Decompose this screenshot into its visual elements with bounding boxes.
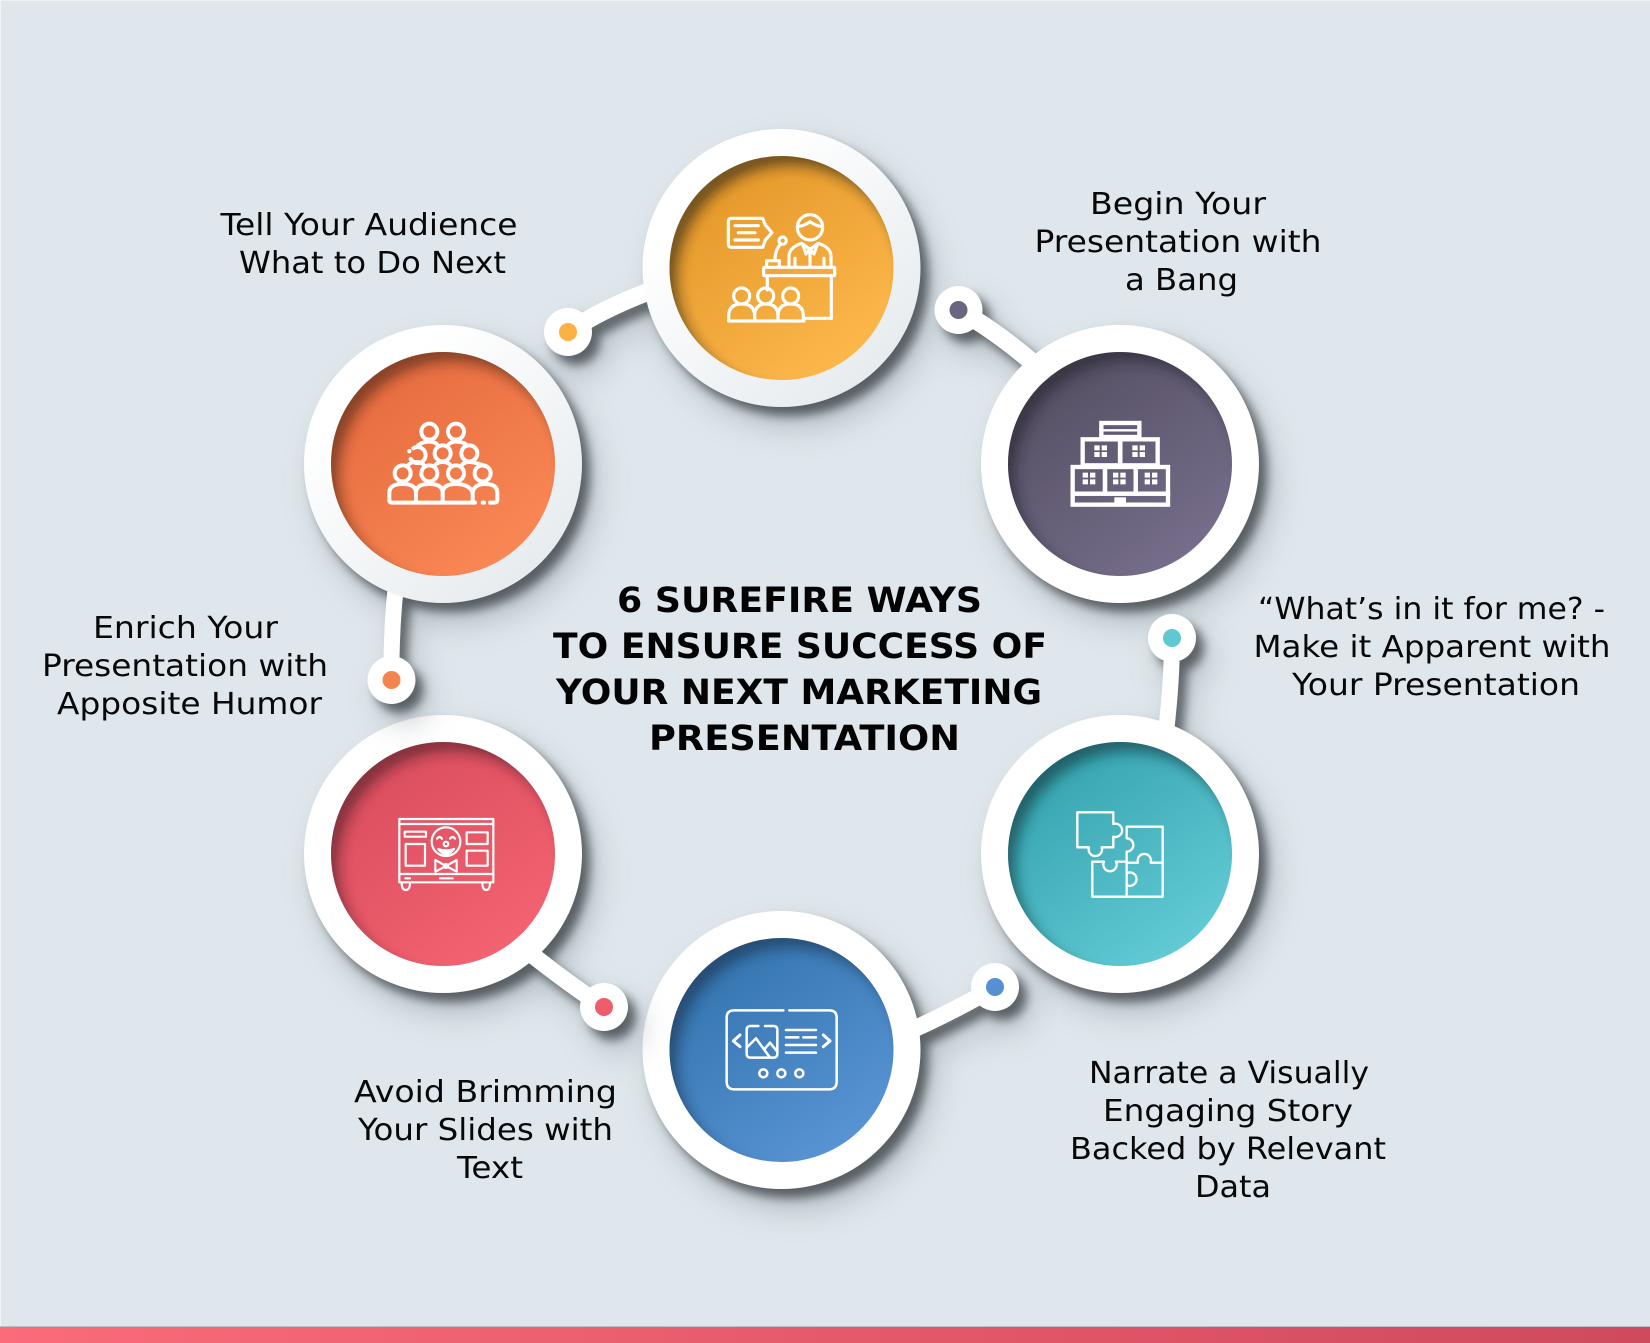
disc: teal bbox=[1008, 742, 1232, 966]
panel: step 1 tell your audience, yellow circle bbox=[544, 129, 920, 407]
disc: yellow bbox=[670, 156, 894, 380]
node dot: red bbox=[595, 998, 613, 1016]
icon: stacked buildings bbox=[1073, 423, 1168, 505]
node dot: yellow bbox=[559, 323, 577, 341]
panel: step 6 enrich with humor, orange circle bbox=[304, 325, 582, 704]
label: avoid brimming slides: Avoid Brimming bbox=[354, 1075, 617, 1110]
label: narrate a visually engaging story bbox=[1070, 1056, 1386, 1205]
panel: step 3 what's in it for me, teal circle bbox=[981, 614, 1259, 993]
icon: screen with clown face bbox=[399, 819, 493, 890]
label: what's in it for me: Make it Apparent with bbox=[1254, 630, 1610, 665]
title: PRESENTATION bbox=[649, 719, 960, 759]
node dot: teal bbox=[1163, 629, 1181, 647]
ring with connector and node: yellow bbox=[544, 129, 920, 407]
disc: red bbox=[331, 742, 555, 966]
label: narrate a visually engaging story: Narrate a Visually bbox=[1089, 1056, 1369, 1091]
label: avoid brimming slides bbox=[354, 1075, 617, 1186]
label: tell your audience bbox=[219, 208, 517, 281]
label: begin your presentation bbox=[1034, 187, 1322, 298]
label: enrich with humor: Enrich Your bbox=[93, 611, 279, 646]
title: 6 SUREFIRE WAYS bbox=[617, 581, 982, 621]
panel: step 2 begin your presentation, purple circle bbox=[934, 286, 1259, 603]
icon: puzzle pieces bbox=[1077, 812, 1163, 897]
label: enrich with humor: Apposite Humor bbox=[57, 687, 323, 722]
panel: step 5 avoid brimming slides, red circle bbox=[304, 715, 628, 1031]
label: begin your presentation: Begin Your bbox=[1090, 187, 1267, 222]
disc: orange bbox=[331, 352, 555, 576]
node dot: orange bbox=[382, 671, 400, 689]
label: narrate a visually engaging story: Backed by Relevant bbox=[1070, 1132, 1386, 1167]
label: what's in it for me: Your Presentation bbox=[1291, 668, 1580, 703]
icon: crowd of people bbox=[389, 424, 497, 503]
label: narrate a visually engaging story: Engaging Story bbox=[1103, 1094, 1353, 1129]
label: tell your audience: Tell Your Audience bbox=[219, 208, 517, 243]
label: narrate a visually engaging story: Data bbox=[1195, 1170, 1271, 1205]
label: avoid brimming slides: Text bbox=[456, 1151, 523, 1186]
label: what's in it for me: “What’s in it for me? - bbox=[1258, 592, 1605, 627]
label: begin your presentation: Presentation with bbox=[1034, 225, 1322, 260]
bottom accent bar bbox=[0, 1326, 1650, 1343]
node dot: blue bbox=[986, 978, 1004, 996]
ring with connector and node: purple bbox=[934, 286, 1259, 603]
label: avoid brimming slides: Your Slides with bbox=[357, 1113, 613, 1148]
title: TO ENSURE SUCCESS OF bbox=[553, 627, 1047, 667]
title: YOUR NEXT MARKETING bbox=[555, 673, 1042, 713]
label: enrich with humor: Presentation with bbox=[42, 649, 328, 684]
title bbox=[553, 581, 1047, 759]
panel: step 4 narrate a visually engaging story, blue circle bbox=[642, 911, 1019, 1189]
ring with connector and node: orange bbox=[304, 325, 582, 704]
disc: blue bbox=[670, 938, 894, 1162]
label: enrich with humor bbox=[42, 611, 328, 722]
icon: slide with image and text bbox=[727, 1010, 837, 1089]
label: tell your audience: What to Do Next bbox=[239, 246, 506, 281]
label: what's in it for me bbox=[1254, 592, 1610, 703]
disc: purple bbox=[1008, 352, 1232, 576]
icon: speaker at podium with audience bbox=[728, 215, 835, 321]
ring with connector and node: red bbox=[304, 715, 628, 1031]
ring with connector and node: teal bbox=[981, 614, 1259, 993]
label: begin your presentation: a Bang bbox=[1125, 263, 1238, 298]
node dot: purple bbox=[950, 301, 968, 319]
ring with connector and node: blue bbox=[642, 911, 1019, 1189]
